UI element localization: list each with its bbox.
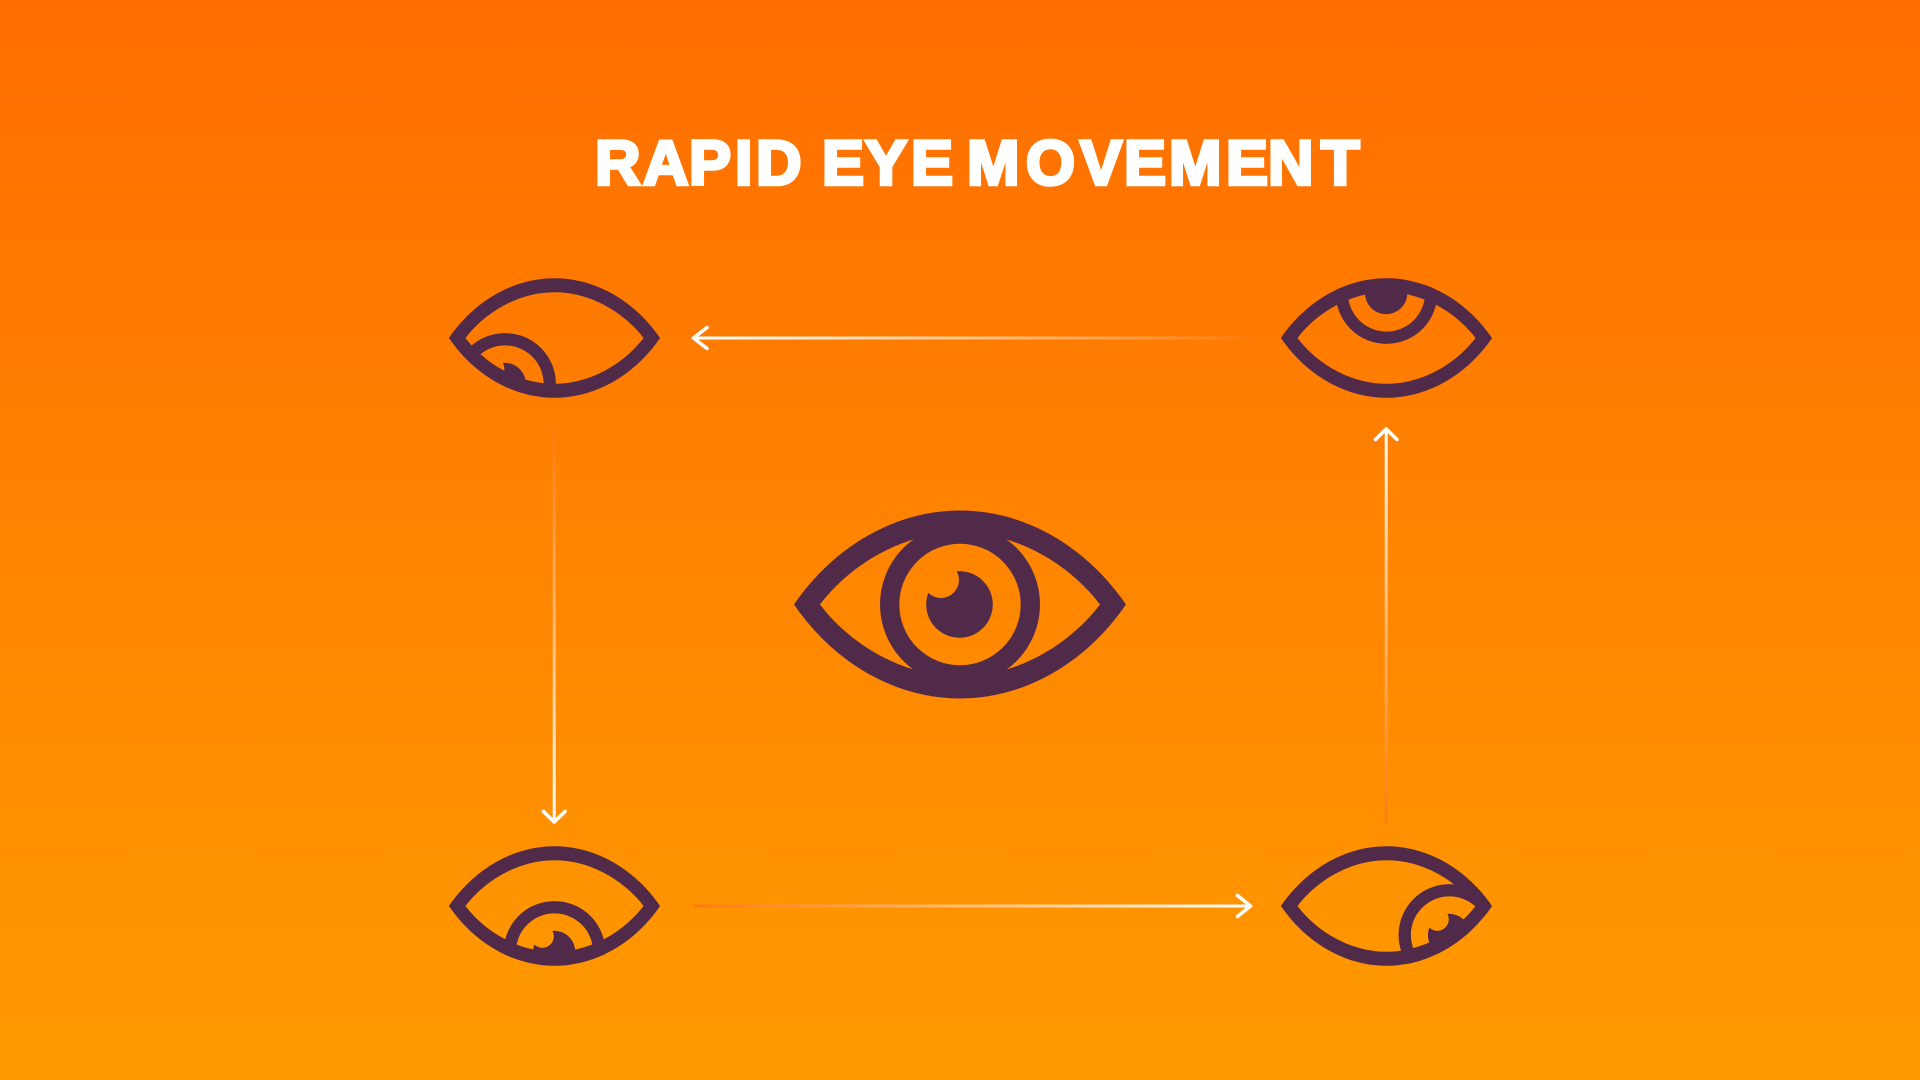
icon: top-left eye looking down-left bbox=[449, 278, 660, 398]
icon: bottom-right eye looking down-right bbox=[1281, 846, 1492, 966]
title: RAPID EYE MOVEMENT bbox=[595, 128, 1359, 198]
arrow: top, right to left bbox=[694, 328, 1256, 348]
arrow: left, top to bottom bbox=[544, 427, 565, 822]
icon: bottom-left eye looking down bbox=[449, 846, 660, 966]
arrow: right, bottom to top bbox=[1376, 428, 1397, 823]
arrow: bottom, left to right bbox=[693, 896, 1250, 916]
icon: top-right eye looking up bbox=[1281, 278, 1492, 398]
icon: central eye looking straight ahead bbox=[794, 510, 1126, 698]
